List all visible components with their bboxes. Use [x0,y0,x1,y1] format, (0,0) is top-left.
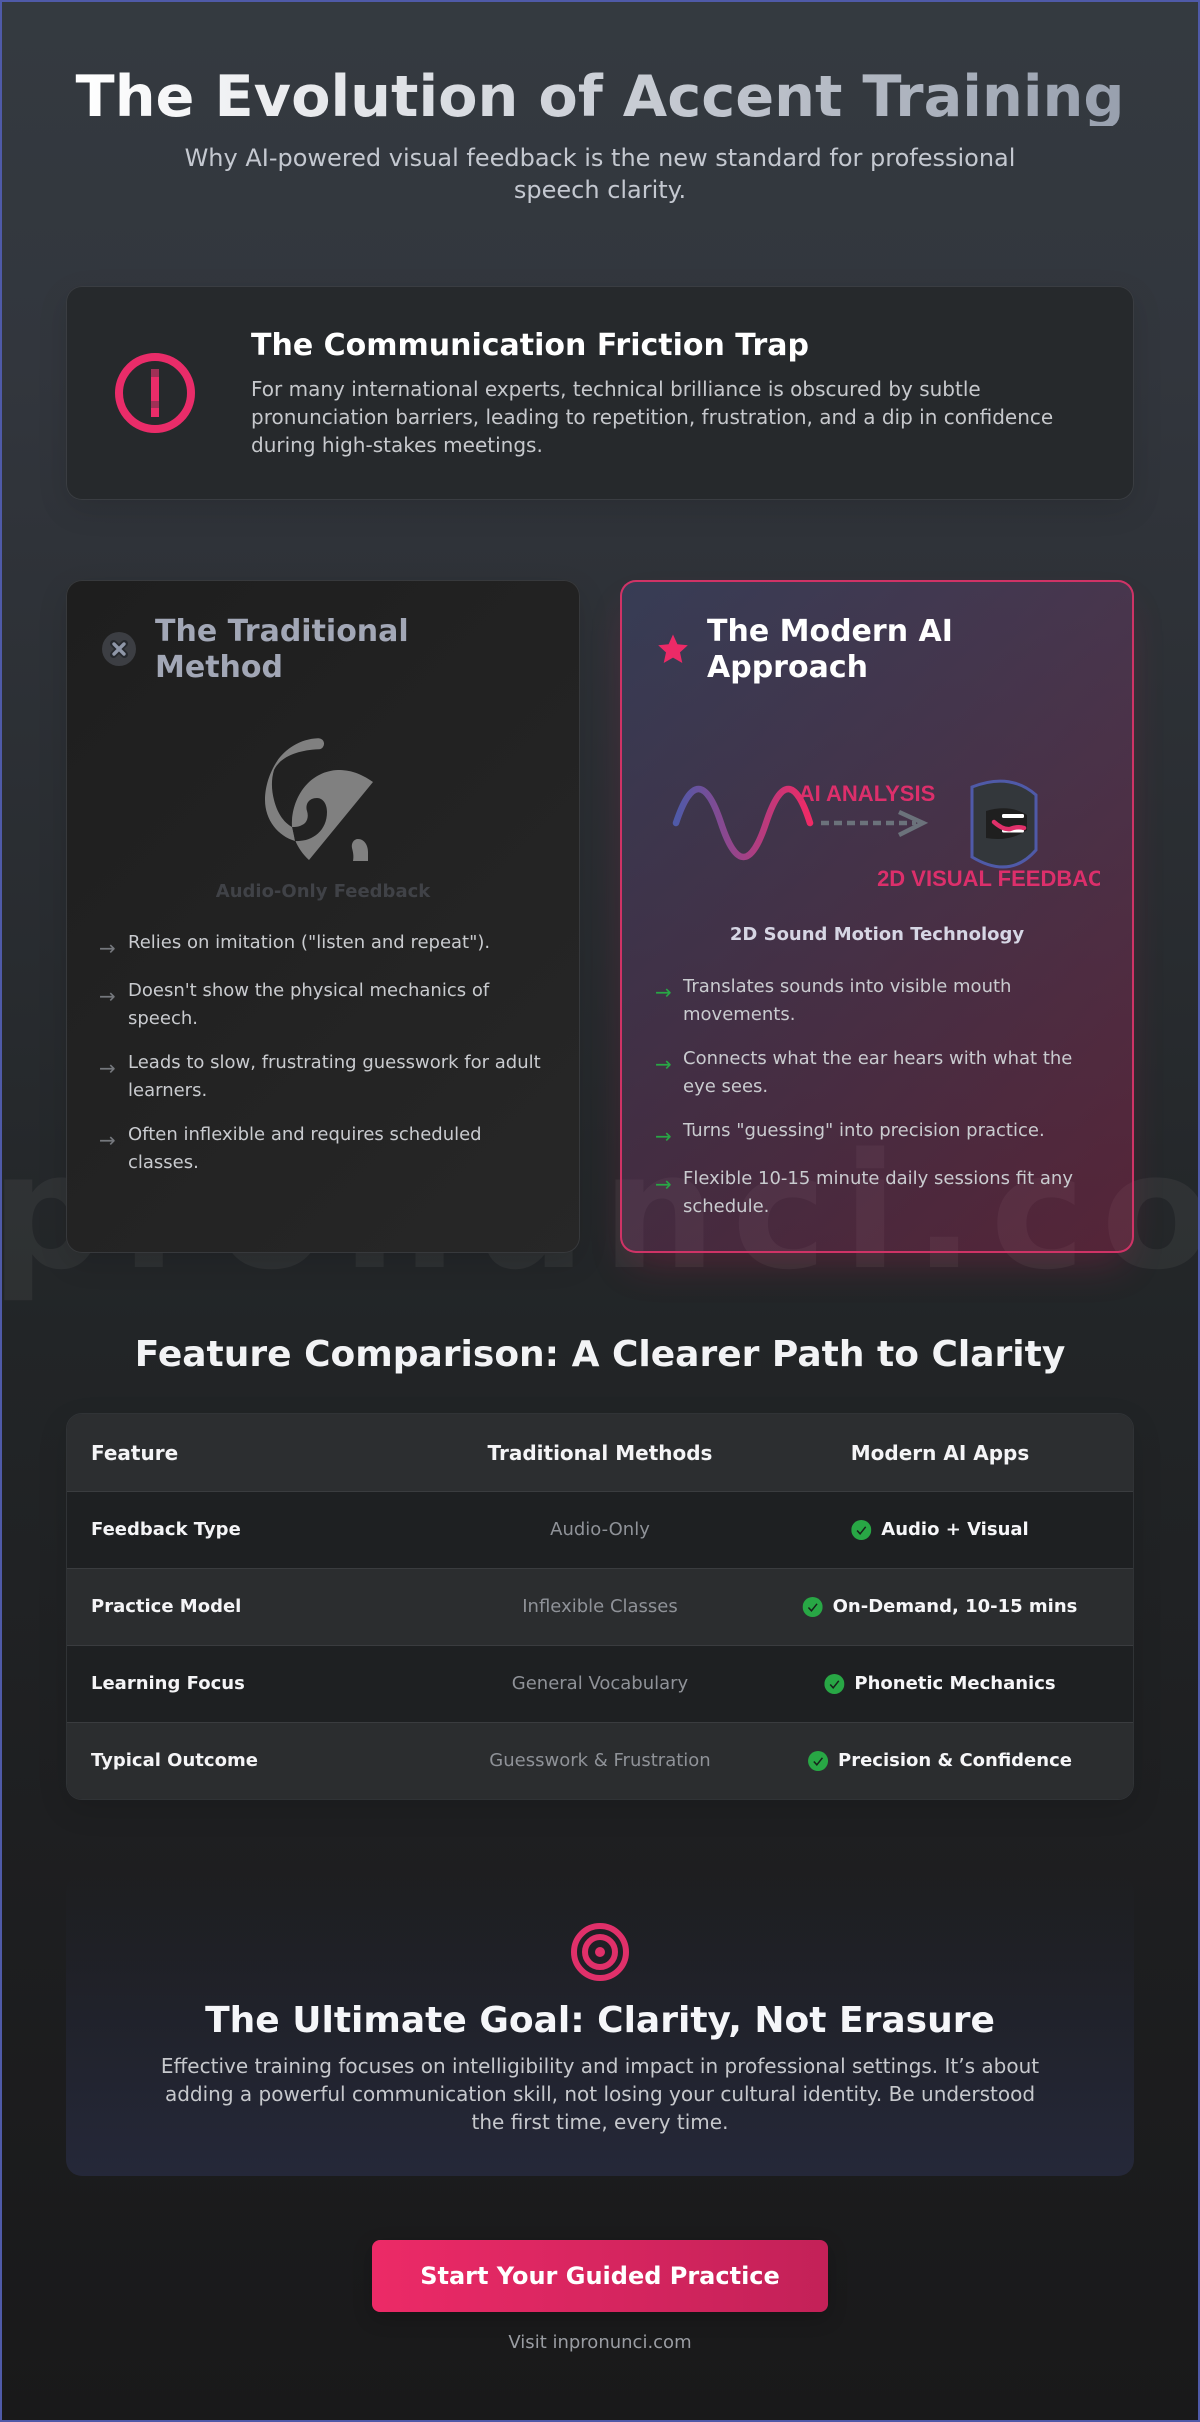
list item [99,1124,482,1173]
table header: Feature [91,1441,178,1465]
row: practice model: Inflexible Classes [522,1596,678,1617]
panel: modern ai approach [620,580,1134,1253]
list item [655,1120,1045,1148]
list item [99,1052,541,1101]
sound wave [676,789,810,857]
goal heading: The Ultimate Goal: Clarity, Not Erasure [205,2000,995,2041]
icon: ear [265,738,373,861]
panel body text: For many international experts, technical brilliance is obscured by subtle [251,377,981,401]
row: practice model: Practice Model [91,1596,241,1617]
list item: → [99,1128,116,1152]
illustration caption: Audio-Only Feedback [216,881,430,902]
card heading [155,614,409,684]
list item: movements. [683,1004,795,1025]
row: feedback type: Feedback Type [91,1519,241,1540]
subtitle [185,144,1015,204]
diagram: sound to visual feedback [672,780,1100,886]
row: feedback type: Audio-Only [550,1519,650,1540]
panel: communication friction trap [66,286,1134,500]
list item: Relies on imitation ("listen and repeat"). [128,932,490,953]
goal body text: adding a powerful communication skill, not losing your cultural identity. Be understood [165,2082,1035,2106]
feature list: traditional [99,932,541,1173]
dashed arrow [821,812,923,835]
row: learning focus: General Vocabulary [512,1673,688,1694]
feature list: modern ai [655,976,1073,1217]
table header: Modern AI Apps [851,1441,1029,1465]
list item [99,980,490,1029]
row: learning focus [67,1645,1133,1722]
list item: → [99,1056,116,1080]
list item: → [99,984,116,1008]
list item: classes. [128,1152,199,1173]
goal body text: Effective training focuses on intelligibility and impact in professional settings. It’s about [161,2054,1039,2078]
icon: cross [102,632,136,666]
table header [67,1414,1133,1491]
list item: eye sees. [683,1076,768,1097]
icon: star [658,634,688,663]
list item: Often inflexible and requires scheduled [128,1124,482,1145]
card heading: The Traditional [155,614,409,648]
panel: ultimate goal [66,1876,1134,2176]
list item: Turns "guessing" into precision practice. [683,1120,1045,1141]
label: 2d visual feedback: 2D VISUAL FEEDBACK [877,866,1120,891]
row: feedback type: Audio + Visual [881,1519,1029,1540]
label: ai analysis: AI ANALYSIS [799,781,935,806]
row: typical outcome: Guesswork & Frustration [489,1750,711,1771]
row: typical outcome: Precision & Confidence [838,1750,1072,1771]
icon: target [571,1923,629,1981]
list item: → [655,1052,672,1076]
row: typical outcome [67,1722,1133,1799]
subtitle: Why AI-powered visual feedback is the new standard for professional [185,144,1015,172]
list item: → [655,1172,672,1196]
list item: Flexible 10-15 minute daily sessions fit any [683,1168,1073,1189]
row: typical outcome: Typical Outcome [91,1750,258,1771]
list item: schedule. [683,1196,769,1217]
row: practice model [67,1568,1133,1645]
title: The Evolution of Accent Training [76,63,1124,130]
panel body text: during high-stakes meetings. [251,433,543,457]
list item [99,932,490,960]
card heading: Method [155,650,283,684]
panel heading: The Communication Friction Trap [251,328,809,363]
list item: Translates sounds into visible mouth [683,976,1011,997]
call to action button: Start Your Guided Practice [420,2262,780,2290]
card heading: Approach [707,650,868,684]
panel: traditional method [66,580,580,1253]
call to action button [372,2240,828,2312]
panel body text: pronunciation barriers, leading to repetition, frustration, and a dip in confidence [251,405,1053,429]
list item: Connects what the ear hears with what the [683,1048,1072,1069]
comparison table [66,1413,1134,1800]
row: learning focus: Learning Focus [91,1673,245,1694]
list item [655,976,1011,1025]
row: learning focus: Phonetic Mechanics [854,1673,1056,1694]
list item: Doesn't show the physical mechanics of [128,980,489,1001]
list item: → [99,936,116,960]
section heading: feature comparison: Feature Comparison: A Clearer Path to Clarity [135,1334,1065,1374]
mouth diagram [972,781,1036,867]
card heading [707,614,953,684]
list item: → [655,1124,672,1148]
list item: learners. [128,1080,207,1101]
list item [655,1168,1073,1217]
card heading: The Modern AI [707,614,953,648]
list item [655,1048,1072,1097]
footer link: Visit inpronunci.com [508,2332,692,2353]
row: feedback type [67,1491,1133,1568]
subtitle: speech clarity. [514,176,686,204]
icon: warning circle [115,353,195,433]
panel body text [251,377,1053,457]
list item: speech. [128,1008,198,1029]
table header: Traditional Methods [488,1441,712,1465]
list item: → [655,980,672,1004]
list item: Leads to slow, frustrating guesswork for adult [128,1052,541,1073]
goal body text: the first time, every time. [472,2110,728,2134]
row: practice model: On-Demand, 10-15 mins [833,1596,1077,1617]
illustration caption: 2D Sound Motion Technology [730,924,1024,945]
goal body text [161,2054,1039,2134]
